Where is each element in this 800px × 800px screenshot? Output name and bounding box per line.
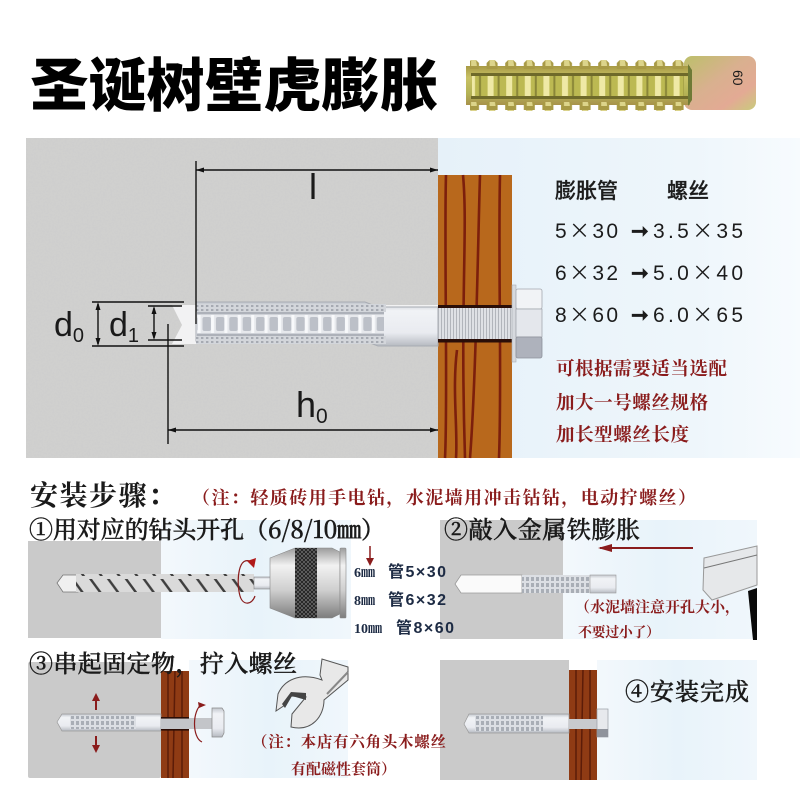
red note: drill advice: （注：轻质砖用手电钻，水泥墙用冲击钻钻，电动拧螺丝） [192,484,696,510]
grey wall [26,138,438,458]
step 3 heading: ③串起固定物，拧入螺丝 [29,644,297,679]
spec table: anchor to screw sizes: ➞ [631,304,649,327]
anchor in hole [455,575,616,593]
anchor sleeve body [196,302,438,346]
anchor and bolt [57,708,224,737]
step 2 heading: ②敲入金属铁膨胀 [444,510,640,545]
drill size table: 10㎜ [354,622,383,637]
red note: screw selection tips [556,355,727,447]
drill size table: 8㎜ [354,594,376,609]
spec table: anchor to screw sizes [555,180,743,329]
spec table: anchor to screw sizes: 6×32 [555,257,618,287]
panel: step 4 complete [440,660,757,780]
red note: screw selection tips: 可根据需要适当选配 [556,355,727,381]
red note: screw selection tips: 加长型螺丝长度 [556,421,689,447]
dimension d1: d [109,306,128,344]
step 1 heading: ①用对应的钻头开孔（6/8/10㎜） [29,510,385,545]
panel: step 1 drill hole [28,520,374,639]
dimension d1 [109,306,182,347]
red note: hole size warning: （水泥墙注意开孔大小， [575,596,740,617]
right light-blue background [438,138,800,458]
dimension h0 [168,324,438,444]
drill bit [57,574,271,592]
spec table: anchor to screw sizes: 螺丝 [667,180,709,203]
spec table: anchor to screw sizes: 膨胀管 [555,180,618,203]
icon: hammer [703,546,757,640]
spec table: anchor to screw sizes: 6.0×65 [653,299,743,329]
red note: hex wood screw: 有配磁性套筒） [291,758,396,779]
bolt through wood [438,305,512,342]
icon: gold expansion anchor product photo: 60 [730,70,746,86]
drill size table: 管8×60 [396,618,454,637]
spec table: anchor to screw sizes: 5.0×40 [653,257,743,287]
icon: wrench [276,659,348,728]
spec table: anchor to screw sizes: ➞ [631,262,649,285]
spec table: anchor to screw sizes: 5×30 [555,215,618,245]
icon: red arrow left [598,544,693,552]
icon: rotation arrow [238,558,256,603]
dimension h0: 0 [316,405,328,428]
drill size table [354,562,454,637]
heading: installation steps: 安装步骤： [30,480,176,512]
red note: hex wood screw: （注：本店有六角头木螺丝 [252,730,446,752]
dimension d0: 0 [73,325,84,347]
dimension d0: d [54,306,73,344]
red note: hex wood screw [252,730,446,779]
drill size table: 6㎜ [354,566,376,581]
drill size table: 管6×32 [388,590,446,609]
anchor and bolt [464,709,608,737]
step 4 heading: ④安装完成 [625,672,749,707]
dimension l [196,161,438,324]
icon: red down arrow [366,546,374,566]
panel: step 3 fasten with wrench [28,659,348,778]
icon: red expansion arrows [92,693,100,753]
panel: step 2 hammer in anchor [440,520,757,640]
washer and hex bolt head [512,285,542,362]
dimension d1: 1 [128,325,139,347]
icon: gold expansion anchor product photo [466,56,756,111]
dimension d0 [54,302,184,347]
spec table: anchor to screw sizes: ➞ [631,220,649,243]
spec table: anchor to screw sizes: 8×60 [555,299,618,329]
drilled hole [172,305,438,344]
drill size table: 管5×30 [388,562,446,581]
red note: screw selection tips: 加大一号螺丝规格 [556,389,708,415]
wood board [569,670,597,780]
wood board [438,175,512,458]
panel: wall cross-section dimension diagram [26,138,800,458]
wood board [161,671,189,778]
dimension l: l [309,166,317,207]
spec table: anchor to screw sizes: 3.5×35 [653,215,743,245]
dimension h0: h [296,384,316,425]
red note: hole size warning: 不要过小了） [578,622,660,642]
title: 圣诞树壁虎膨胀 [30,39,438,123]
drill chuck [270,548,346,618]
red note: hole size warning [575,596,740,642]
icon: rotation arrow [194,702,206,742]
